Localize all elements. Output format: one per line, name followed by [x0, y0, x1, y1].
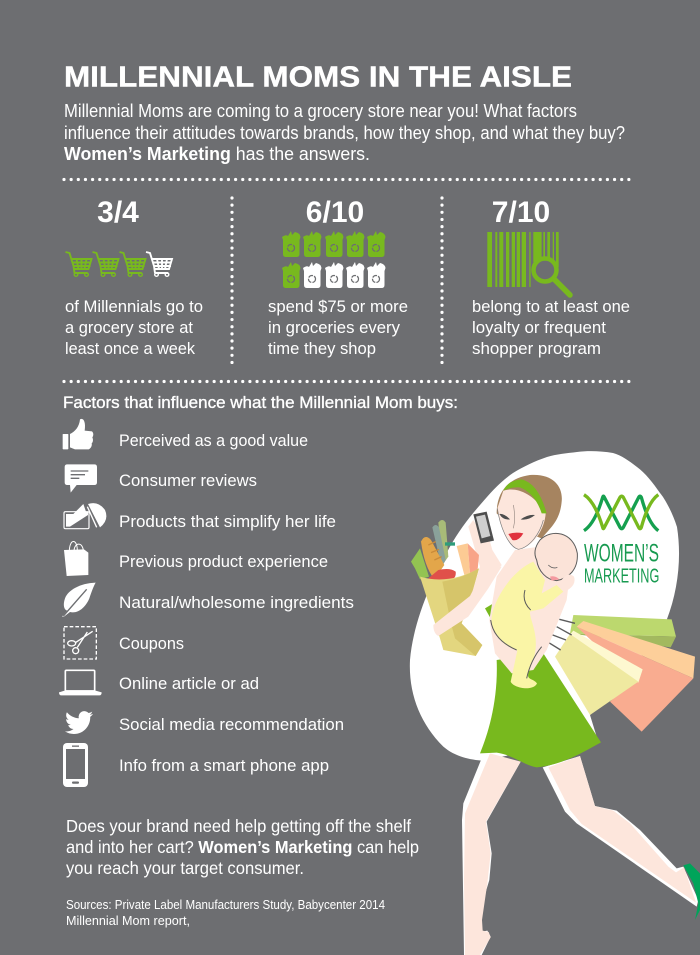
stat text — [472, 297, 630, 358]
icon: smart phone — [63, 743, 88, 787]
sources: Millennial Mom report, — [66, 914, 190, 928]
factor: phone app: Info from a smart phone app — [119, 756, 329, 775]
stat text: belong to at least one — [472, 297, 630, 316]
logo: Women's Marketing — [584, 495, 659, 588]
icon: thumbs up — [63, 419, 93, 449]
stat text: time they shop — [268, 339, 376, 358]
call to action — [66, 816, 419, 878]
icon: laptop — [59, 670, 102, 695]
grocery bag and raised arm — [411, 520, 502, 656]
factors heading: Factors that influence what the Millennial Mom buys: — [63, 393, 458, 412]
stat text: in groceries every — [268, 318, 400, 337]
call to action: Does your brand need help getting off the shelf — [66, 816, 411, 836]
phone — [473, 512, 494, 543]
stat text: a grocery store at — [65, 318, 193, 337]
icon: shopping carts — [66, 252, 172, 276]
icon: shopping bag — [64, 542, 88, 576]
torso — [489, 547, 570, 673]
icon: barcode with magnifier — [487, 232, 570, 295]
icon: grocery bags — [282, 231, 386, 288]
factor: simplify life: Products that simplify her life — [119, 512, 336, 531]
icon: leaf — [62, 583, 96, 617]
phone, face and logo — [473, 475, 659, 688]
stat text: shopper program — [472, 339, 601, 358]
legs — [462, 753, 700, 955]
stat text: of Millennials go to — [65, 297, 203, 316]
factor: previous experience: Previous product experience — [119, 552, 328, 571]
factor: consumer reviews: Consumer reviews — [119, 471, 257, 490]
sources: Sources: Private Label Manufacturers Study, Babycenter 2014 — [66, 898, 385, 912]
intro text: Women’s Marketing has the answers. — [64, 144, 370, 164]
icon: twitter bird — [65, 711, 93, 734]
stat text: loyalty or frequent — [472, 318, 606, 337]
factor: social media: Social media recommendation — [119, 715, 344, 734]
stat text — [268, 297, 408, 358]
stat: 6/10: 6/10 — [306, 196, 364, 229]
stat: 6/10 — [268, 196, 408, 358]
title: MILLENNIAL MOMS IN THE AISLE — [64, 62, 572, 94]
intro text: influence their attitudes towards brands, how they shop, and what they buy? — [64, 123, 625, 143]
intro text — [64, 101, 625, 164]
stat: 7/10: 7/10 — [492, 196, 550, 229]
factor: perceived value: Perceived as a good value — [119, 431, 308, 450]
call to action: and into her cart? Women’s Marketing can help — [66, 837, 419, 857]
icon: speech bubble — [65, 464, 97, 493]
hair — [497, 475, 562, 538]
stat text — [65, 297, 203, 358]
stat: 7/10 — [472, 196, 630, 358]
factor: natural ingredients: Natural/wholesome ingredients — [119, 593, 354, 612]
stat: 3/4 — [65, 196, 203, 358]
factor: coupons: Coupons — [119, 634, 184, 653]
factor: online article: Online article or ad — [119, 674, 259, 693]
face — [497, 479, 547, 549]
shopping bags — [528, 615, 695, 732]
call to action: you reach your target consumer. — [66, 858, 304, 878]
illustration: woman with baby, bags and logo — [410, 451, 700, 955]
intro text: Millennial Moms are coming to a grocery store near you! What factors — [64, 101, 577, 121]
factors list — [59, 419, 354, 787]
logo: Women's Marketing: WOMEN’S — [584, 541, 659, 568]
baby — [491, 533, 577, 688]
icon: folder and tablet — [64, 503, 106, 529]
icon: coupon scissors — [64, 627, 96, 659]
sources — [66, 898, 385, 928]
stat text: spend $75 or more — [268, 297, 408, 316]
stat: 3/4: 3/4 — [97, 196, 139, 229]
white blob — [410, 451, 679, 761]
dress — [480, 653, 601, 767]
stat text: least once a week — [65, 339, 195, 358]
